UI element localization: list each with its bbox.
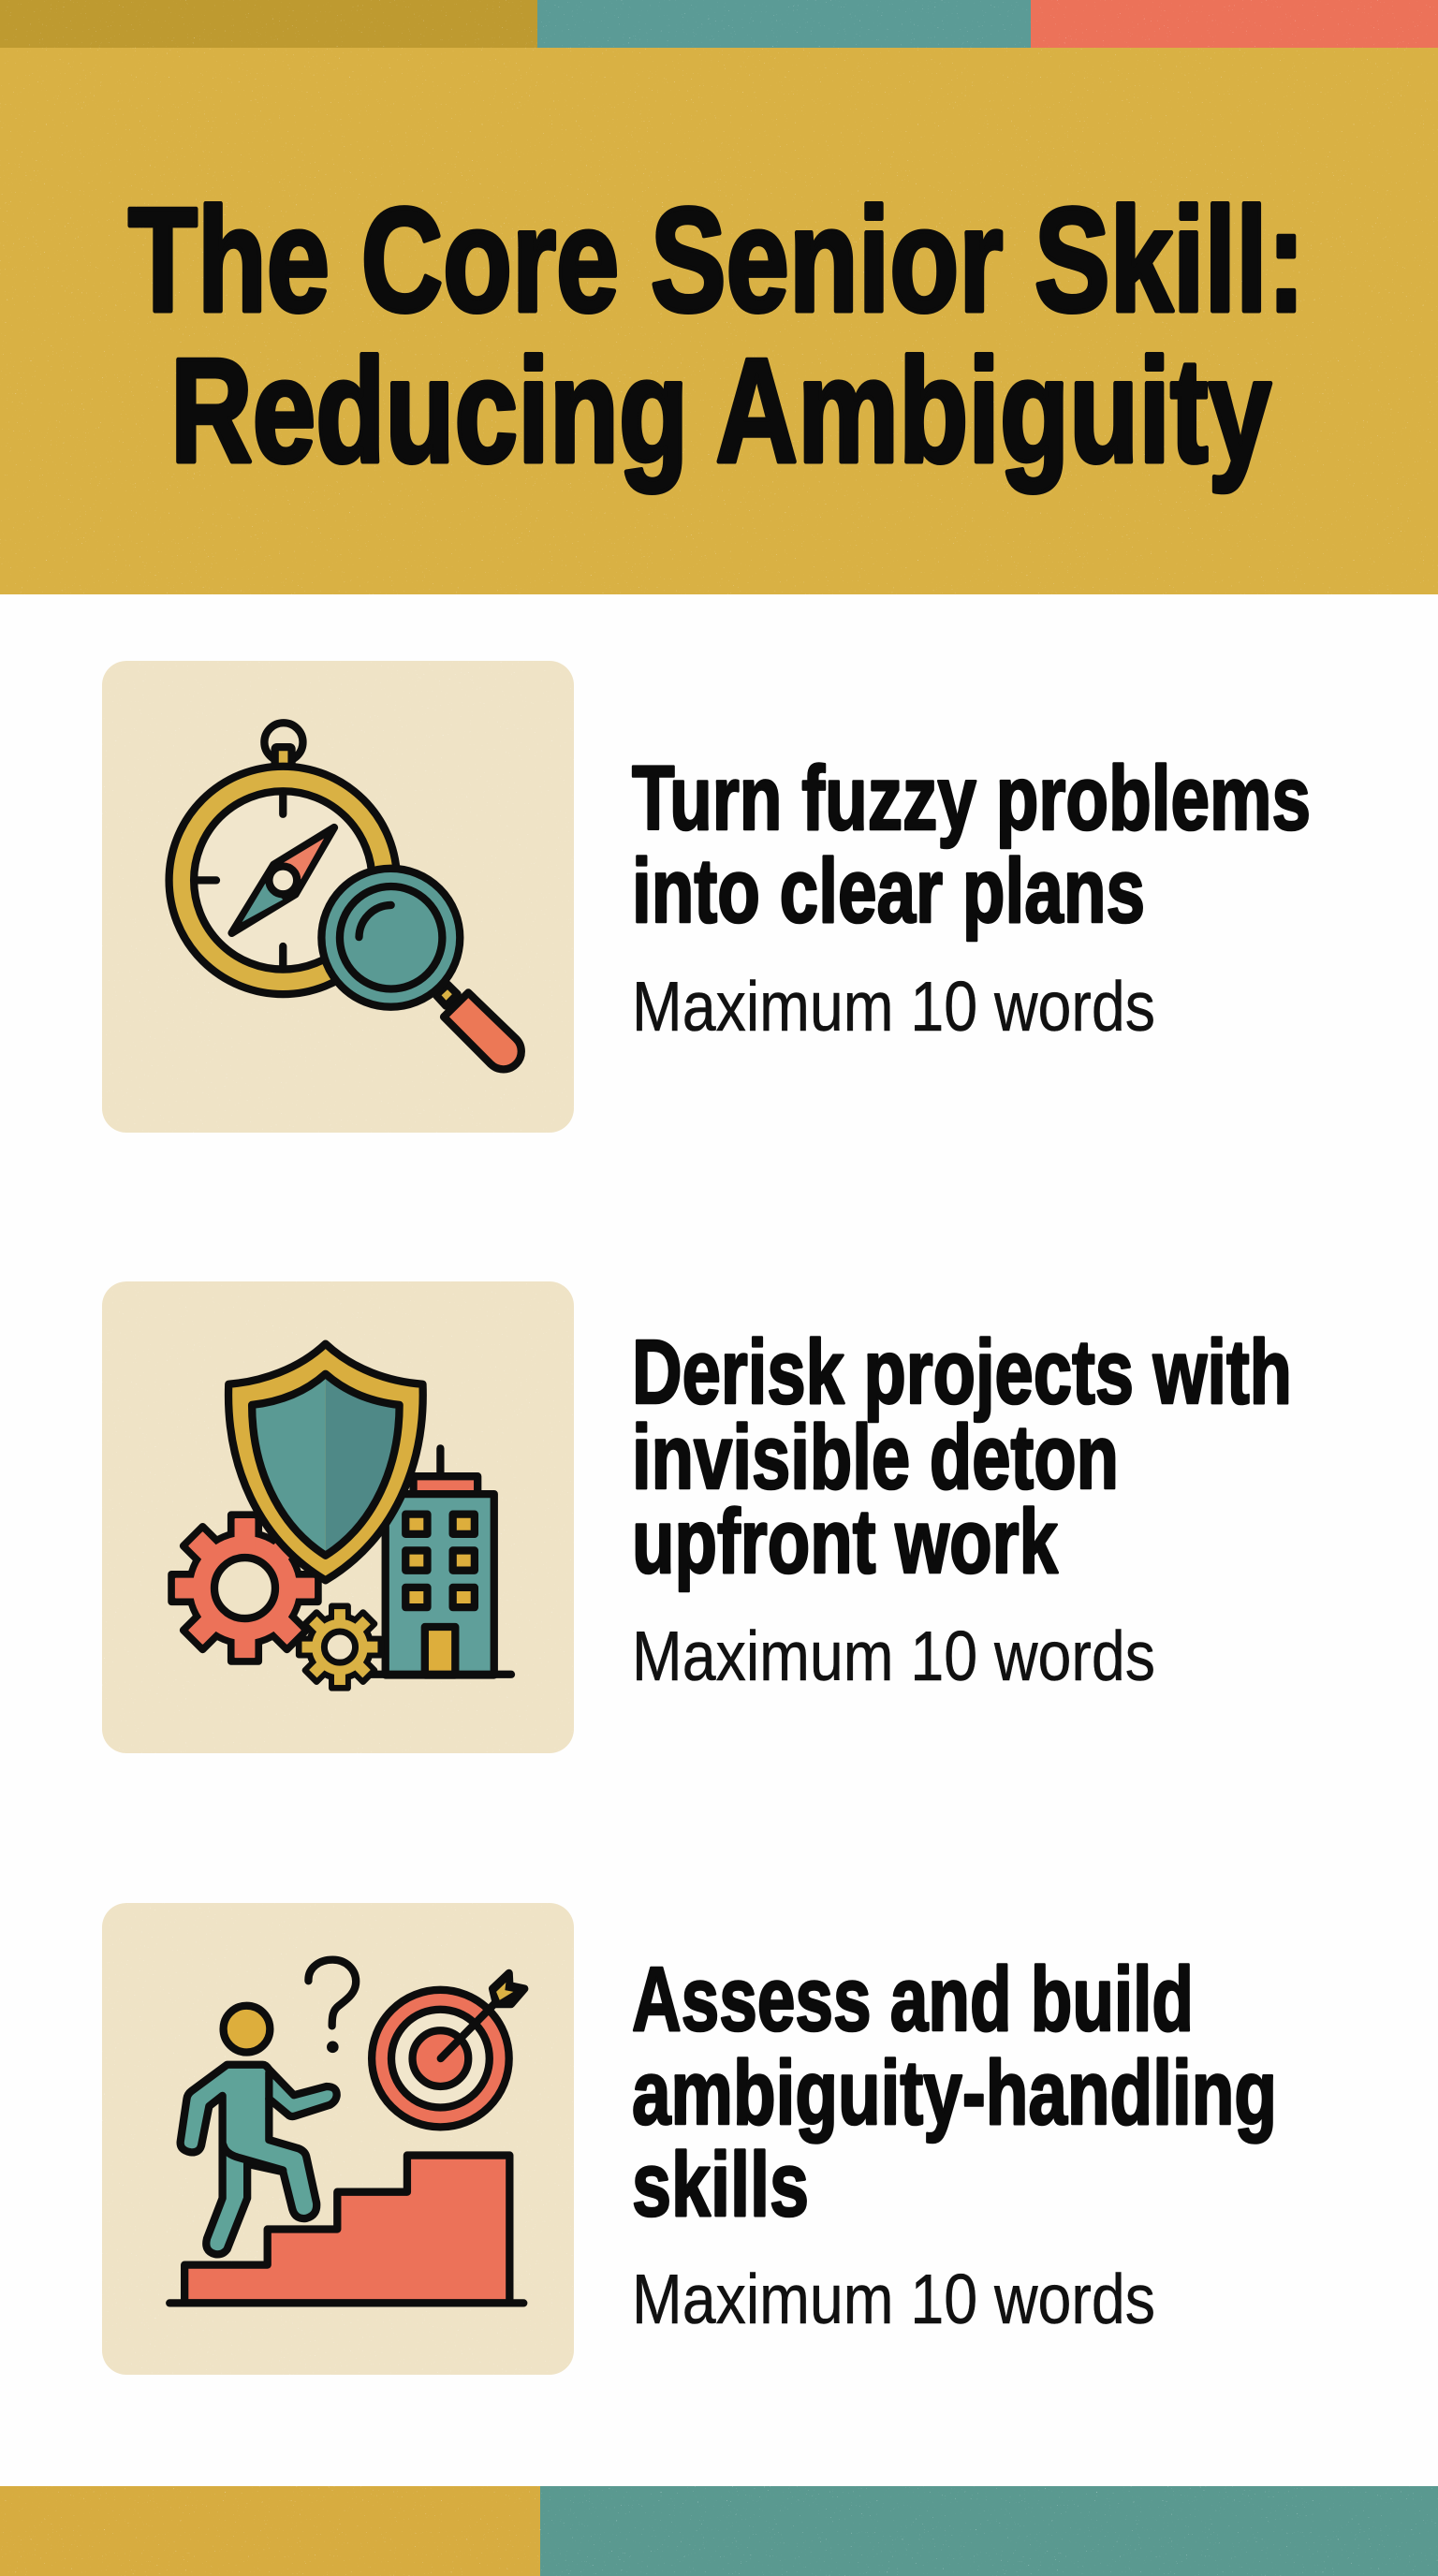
header band [0,48,1438,594]
bottom colour strip [0,2486,1438,2576]
icon: climbing figure, question mark and target [169,1960,524,2303]
text block: item 2: Maximum 10 words [632,1617,1155,1695]
text block: item 2 [632,1321,1292,1695]
icon: compass and magnifying glass [169,723,521,1069]
icon: shield, gears and building [168,1344,511,1691]
text block: item 1: Maximum 10 words [632,967,1155,1046]
text block: item 3: Assess and build [632,1948,1194,2050]
text block: item 3: Maximum 10 words [632,2260,1155,2338]
text block: item 2: invisible deton [632,1406,1119,1508]
text block: item 3: skills [632,2133,809,2235]
text block: item 1: into clear plans [632,840,1145,942]
top colour strip [0,0,1438,48]
text block: item 1 [632,747,1311,1046]
text block: item 3 [632,1948,1277,2338]
panel: card backgrounds [102,661,574,2375]
title [128,178,1305,493]
text block: item 2: upfront work [632,1490,1059,1592]
